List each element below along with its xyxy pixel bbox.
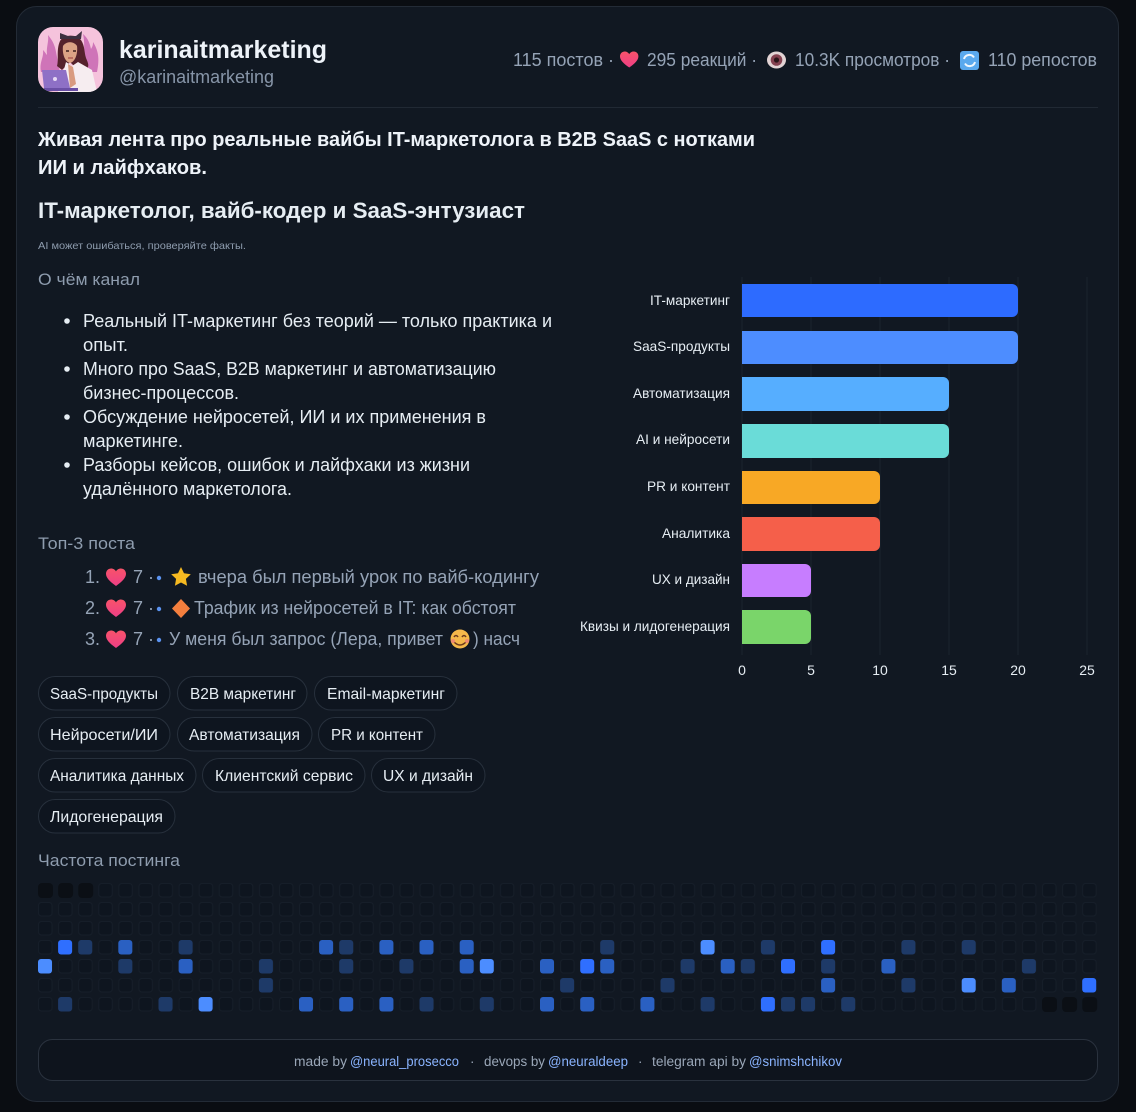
bar chart: topics xyxy=(580,277,1095,678)
footer: @neural_prosecco xyxy=(350,1054,459,1069)
tag xyxy=(202,758,365,792)
tag: Клиентский сервис xyxy=(215,768,353,785)
bullet list: about channel: Много про SaaS, B2B маркетинг и автоматизацию xyxy=(83,359,496,379)
bar: AI и нейросети xyxy=(742,424,949,458)
tag xyxy=(178,676,307,710)
bar: Аналитика xyxy=(742,517,880,551)
tag xyxy=(372,758,485,792)
stats row: 295 реакций · xyxy=(647,50,757,70)
bar: UX и дизайн xyxy=(742,564,811,597)
list: top posts: 7 · xyxy=(133,629,154,649)
disclaimer: AI может ошибаться, проверяйте факты. xyxy=(38,240,246,252)
bullet list: about channel xyxy=(64,311,552,499)
bar: Автоматизация xyxy=(742,377,949,411)
heading: channel description: ИИ и лайфхаков. xyxy=(38,157,207,179)
icon: channel avatar xyxy=(38,27,103,92)
stats row: 10.3K просмотров · xyxy=(795,50,950,70)
tag xyxy=(314,676,457,710)
stats row: 110 репостов xyxy=(988,50,1097,70)
tag xyxy=(38,800,175,833)
heading: about channel: О чём канал xyxy=(38,270,140,289)
tag: SaaS-продукты xyxy=(50,686,158,703)
bar: IT-маркетинг xyxy=(742,284,1018,317)
list: top posts: ) насч xyxy=(473,629,520,649)
icon: repost xyxy=(960,51,979,70)
tag: Лидогенерация xyxy=(50,809,163,826)
heatmap: posting frequency xyxy=(38,883,1097,1012)
tag: UX и дизайн xyxy=(383,768,473,785)
heading: top posts: Топ-3 поста xyxy=(38,534,136,553)
footer: devops by xyxy=(484,1054,545,1069)
list: top posts: У меня был запрос (Лера, привет xyxy=(169,629,443,649)
bullet list: about channel: Разборы кейсов, ошибок и лайфхаки из жизни xyxy=(83,455,470,475)
bullet list: about channel: бизнес-процессов. xyxy=(83,383,239,403)
list: top posts: 1. xyxy=(85,567,100,587)
heading: channel description xyxy=(37,129,755,179)
tags xyxy=(38,676,485,833)
stats row: 115 постов · xyxy=(513,50,614,70)
bullet list: about channel: Реальный IT-маркетинг без теорий — только практика и xyxy=(83,311,552,331)
chart category labels: SaaS-продукты xyxy=(633,338,730,354)
chart axis ticks: 10 xyxy=(872,662,888,678)
bullet list: about channel: опыт. xyxy=(83,335,128,355)
title: karinaitmarketing xyxy=(119,36,327,64)
list: top posts: вчера был первый урок по вайб-кодингу xyxy=(198,567,539,587)
tag: B2B маркетинг xyxy=(190,686,296,703)
chart category labels: Квизы и лидогенерация xyxy=(580,618,730,634)
stats row xyxy=(513,50,1097,70)
footer: · xyxy=(638,1054,642,1069)
tag xyxy=(318,718,435,751)
chart category labels: Аналитика xyxy=(662,525,730,541)
list: top posts: Трафик из нейросетей в IT: как обстоят xyxy=(194,598,516,618)
heading: channel description: Живая лента про реальные вайбы IT-маркетолога в B2B SaaS с нотками xyxy=(37,129,755,151)
chart category labels xyxy=(580,292,731,634)
bullet list: about channel: маркетинге. xyxy=(83,431,183,451)
footer: @neuraldeep xyxy=(548,1054,628,1069)
list: top posts: 3. xyxy=(85,629,100,649)
footer: · xyxy=(470,1054,474,1069)
chart axis ticks xyxy=(738,662,1095,678)
chart category labels: Автоматизация xyxy=(633,385,730,401)
footer xyxy=(38,1040,1098,1080)
chart axis ticks: 25 xyxy=(1079,662,1095,678)
tag: Email-маркетинг xyxy=(327,686,445,703)
tag xyxy=(38,758,196,792)
icon: smile xyxy=(450,630,470,648)
chart category labels: UX и дизайн xyxy=(652,571,730,587)
bullet list: about channel: Обсуждение нейросетей, ИИ и их применения в xyxy=(83,407,486,427)
chart axis ticks: 0 xyxy=(738,662,746,678)
tag: PR и контент xyxy=(331,727,424,744)
chart axis ticks: 15 xyxy=(941,662,957,678)
channel handle: @karinaitmarketing xyxy=(119,67,274,87)
chart category labels: IT-маркетинг xyxy=(650,292,730,308)
bar: PR и контент xyxy=(742,471,880,504)
tag: Нейросети/ИИ xyxy=(50,727,158,744)
icon: diamond xyxy=(172,599,190,618)
icon: heart xyxy=(620,51,638,68)
bar: Квизы и лидогенерация xyxy=(742,610,811,644)
list: top posts: 7 · xyxy=(133,567,154,587)
tag xyxy=(178,718,312,751)
list: top posts: 2. xyxy=(85,598,100,618)
heading: posting frequency: Частота постинга xyxy=(38,851,181,870)
tag: Автоматизация xyxy=(189,727,300,744)
tag xyxy=(38,718,170,751)
icon: star xyxy=(171,567,191,586)
chart axis ticks: 5 xyxy=(807,662,815,678)
tag xyxy=(38,676,170,710)
chart category labels: PR и контент xyxy=(647,478,731,494)
bar: SaaS-продукты xyxy=(742,331,1018,364)
chart category labels: AI и нейросети xyxy=(636,431,730,447)
list: top posts: 7 · xyxy=(133,598,154,618)
tag: Аналитика данных xyxy=(50,768,184,785)
bullet list: about channel: удалённого маркетолога. xyxy=(83,479,292,499)
footer: @snimshchikov xyxy=(749,1054,842,1069)
heading: author role: IT-маркетолог, вайб-кодер и SaaS-энтузиаст xyxy=(38,198,525,223)
footer: telegram api by xyxy=(652,1054,746,1069)
chart axis ticks: 20 xyxy=(1010,662,1026,678)
footer: made by xyxy=(294,1054,347,1069)
list: top posts xyxy=(85,567,539,649)
icon: eye xyxy=(767,52,786,68)
